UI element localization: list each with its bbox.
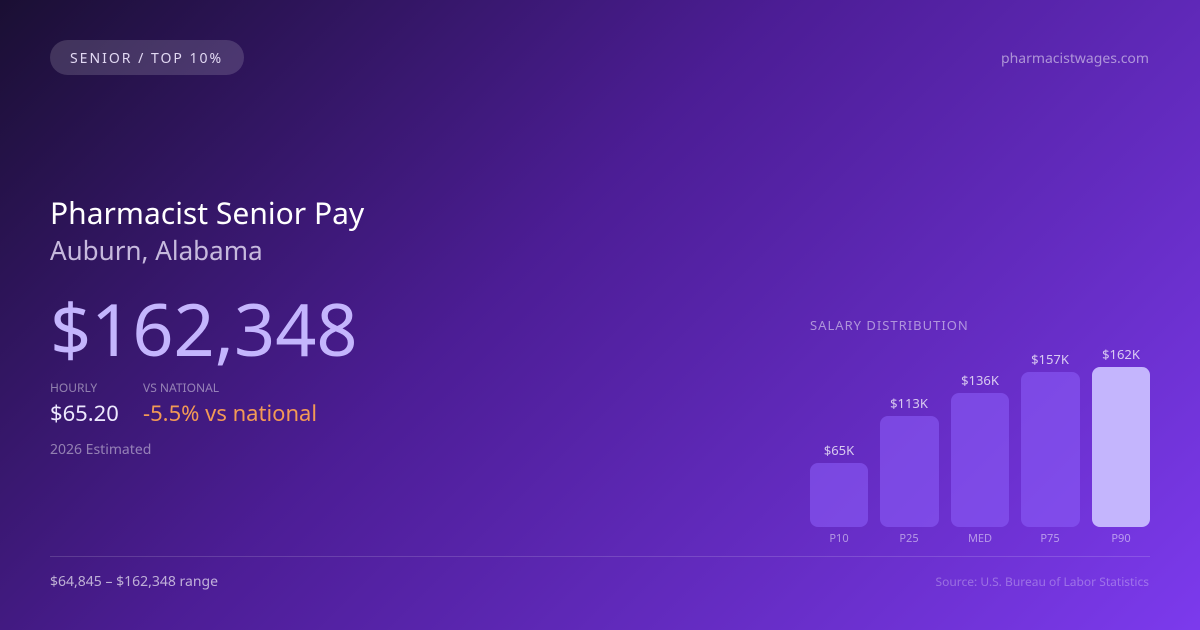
bar P75: $157K: [1031, 350, 1069, 368]
stat: vs national: VS NATIONAL: [143, 379, 219, 396]
bar P10: [810, 441, 868, 546]
bar median: [951, 371, 1009, 546]
bar P25: [880, 394, 939, 546]
bar P90: P90: [1111, 531, 1131, 546]
bar P75: P75: [1040, 531, 1060, 546]
site name: pharmacistwages.com: [1001, 49, 1149, 68]
location subtitle: Auburn, Alabama: [50, 232, 263, 268]
bar median: MED: [968, 531, 992, 546]
chart: salary distribution: [810, 316, 1150, 546]
stat: vs national: [143, 379, 317, 428]
chart heading: SALARY DISTRIBUTION: [810, 316, 969, 334]
source note: Source: U.S. Bureau of Labor Statistics: [936, 573, 1149, 590]
stat: hourly: $65.20: [50, 398, 119, 428]
bar P25: P25: [899, 531, 919, 546]
stat: vs national: -5.5% vs national: [143, 398, 317, 428]
title: Pharmacist Senior Pay: [50, 192, 364, 233]
stat: hourly: HOURLY: [50, 379, 97, 396]
badge: senior / top 10%: SENIOR / TOP 10%: [70, 49, 223, 68]
bar median: $136K: [961, 371, 999, 389]
headline salary: $162,348: [50, 280, 358, 378]
bar P75: [1021, 350, 1080, 546]
badge: senior / top 10%: [50, 40, 244, 75]
bar P10: P10: [829, 531, 849, 546]
bar P25: $113K: [890, 394, 928, 412]
bar P90: [1092, 345, 1150, 546]
bar P90: $162K: [1102, 345, 1140, 363]
estimate note: 2026 Estimated: [50, 440, 151, 459]
bar P10: $65K: [824, 441, 854, 459]
salary range: $64,845 – $162,348 range: [50, 572, 218, 591]
stat: hourly: [50, 379, 119, 428]
